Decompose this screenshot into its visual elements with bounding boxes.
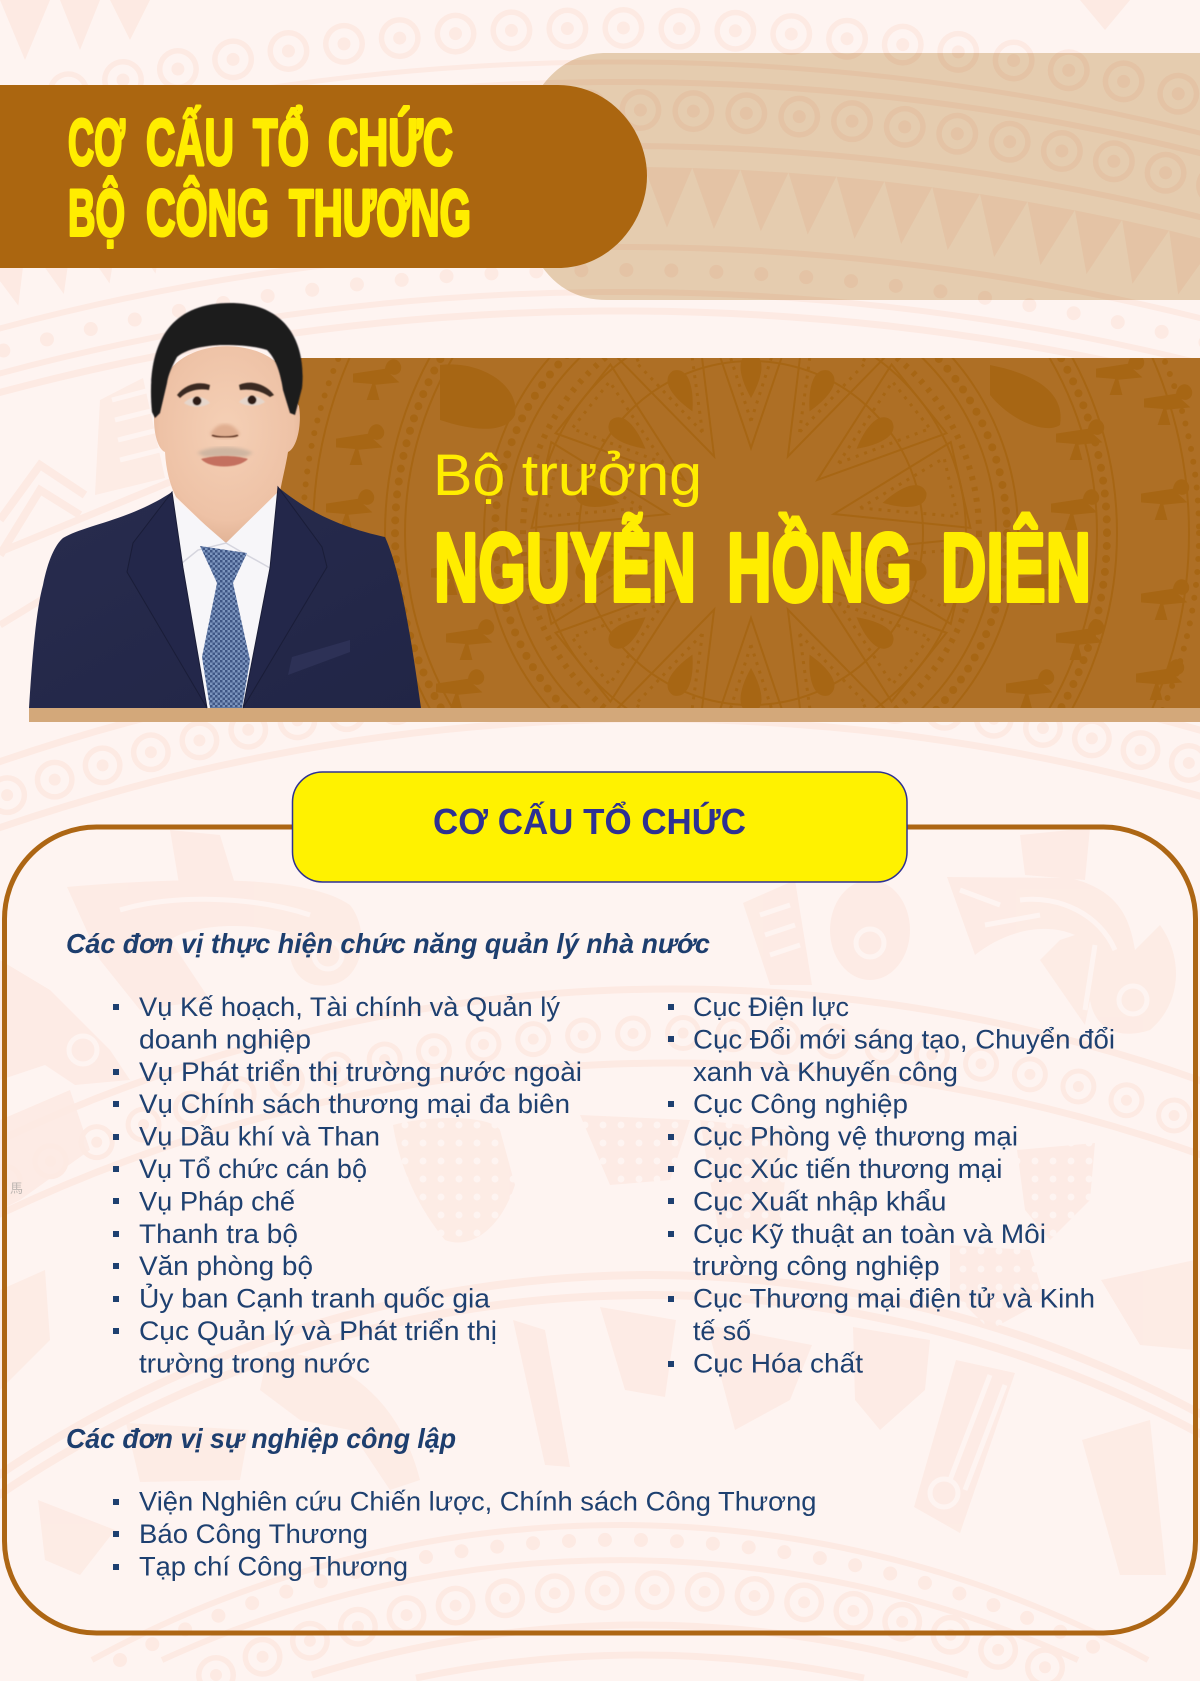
item: Cục Điện lực	[693, 992, 849, 1022]
pocket	[288, 640, 350, 675]
item: xanh và Khuyến công	[693, 1057, 958, 1087]
minister name block	[433, 443, 1091, 622]
heading: state management units: Các đơn vị thực hiện chức năng quản lý nhà nước	[66, 928, 710, 959]
band footer strip	[29, 708, 1200, 722]
item	[113, 992, 560, 1054]
background pattern: triangle band	[0, 0, 1200, 312]
item: Viện Nghiên cứu Chiến lược, Chính sách Công Thương	[139, 1487, 816, 1517]
item	[113, 1316, 497, 1378]
title text: CÔNG	[146, 176, 269, 250]
role label: Bộ trưởng	[433, 443, 702, 508]
item: Cục Xúc tiến thương mại	[693, 1154, 1002, 1184]
item: Văn phòng bộ	[139, 1251, 313, 1281]
tie	[200, 546, 250, 708]
collar shadow	[182, 543, 270, 568]
hair	[151, 303, 303, 418]
item: Cục Phòng vệ thương mại	[693, 1122, 1018, 1152]
mouth	[201, 456, 248, 466]
item	[668, 1284, 1095, 1346]
item: trường công nghiệp	[693, 1251, 940, 1281]
moustache shade	[197, 447, 253, 457]
title text: BỘ	[68, 176, 125, 250]
item: tế số	[693, 1316, 751, 1346]
neck and head skin	[154, 346, 300, 545]
item: Cục Quản lý và Phát triển thị	[139, 1316, 497, 1346]
shirt	[173, 490, 280, 708]
section badge	[292, 772, 907, 882]
badge title: CƠ CẤU TỔ CHỨC	[433, 799, 746, 842]
item	[668, 1024, 1115, 1087]
title text: CƠ	[68, 105, 125, 179]
item: doanh nghiệp	[139, 1024, 311, 1054]
heading: public service units: Các đơn vị sự nghiệp công lập	[66, 1423, 456, 1454]
brows	[177, 383, 274, 398]
minister name: DIÊN	[941, 513, 1091, 622]
item: Vụ Phát triển thị trường nước ngoài	[139, 1057, 582, 1087]
list: left column	[113, 992, 582, 1378]
item: Báo Công Thương	[139, 1519, 368, 1549]
suit jacket	[29, 487, 421, 708]
minister band with bronze drum pattern	[275, 358, 1200, 708]
item: Vụ Dầu khí và Than	[139, 1122, 380, 1152]
list: public service units	[113, 1487, 816, 1581]
title text	[68, 105, 471, 250]
portrait of minister	[29, 303, 421, 708]
minister name: HỒNG	[727, 513, 912, 622]
eyes	[184, 396, 265, 407]
item: Cục Xuất nhập khẩu	[693, 1186, 946, 1216]
title text: THƯƠNG	[289, 176, 471, 250]
item: Cục Công nghiệp	[693, 1089, 908, 1119]
item: Vụ Tổ chức cán bộ	[139, 1154, 367, 1184]
minister name: NGUYỄN	[434, 513, 696, 622]
background pattern: details cut out of figures	[69, 390, 1147, 1507]
nose	[210, 424, 240, 438]
left lapel	[127, 492, 207, 708]
stray glyph: 馬	[10, 1178, 23, 1197]
organisation panel frame	[4, 827, 1196, 1633]
item: Ủy ban Cạnh tranh quốc gia	[139, 1282, 491, 1314]
item	[668, 1219, 1046, 1281]
tan decorative band behind title	[510, 53, 1200, 300]
item: Cục Đổi mới sáng tạo, Chuyển đổi	[693, 1024, 1115, 1054]
background pattern: bronze drum bands, upper	[0, 28, 1200, 403]
item: Cục Hóa chất	[693, 1348, 864, 1378]
background pattern: lower drum bands	[0, 465, 1200, 1678]
item: trường trong nước	[139, 1348, 370, 1378]
item: Thanh tra bộ	[139, 1219, 298, 1249]
item: Cục Kỹ thuật an toàn và Môi	[693, 1219, 1046, 1249]
item: Tạp chí Công Thương	[139, 1551, 408, 1581]
title text: CHỨC	[328, 105, 453, 179]
title text: TỔ	[253, 105, 309, 179]
list: right column	[668, 992, 1115, 1378]
background pattern: large birds and dotted figures	[0, 378, 1195, 1575]
nostril shadow	[212, 435, 238, 437]
item: Vụ Kế hoạch, Tài chính và Quản lý	[139, 992, 560, 1022]
right lapel	[243, 487, 327, 708]
minister name	[434, 513, 1091, 622]
item: Vụ Pháp chế	[139, 1186, 295, 1216]
item: Cục Thương mại điện tử và Kinh	[693, 1284, 1095, 1314]
item: Vụ Chính sách thương mại đa biên	[139, 1089, 570, 1119]
title band	[0, 85, 647, 268]
title text: CẤU	[146, 105, 234, 179]
